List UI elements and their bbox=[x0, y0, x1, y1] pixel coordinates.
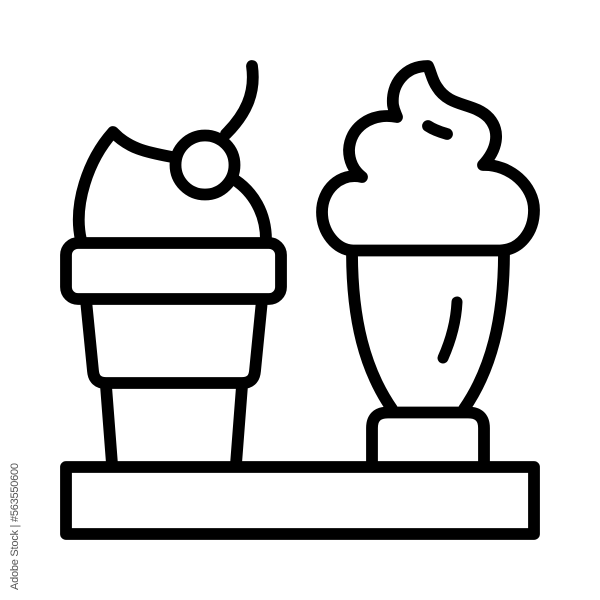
lower cup body bbox=[106, 386, 242, 464]
left cream scoop bbox=[79, 132, 266, 240]
cherry stem bbox=[226, 66, 253, 134]
tray bbox=[66, 467, 534, 534]
upper cup body bbox=[86, 300, 262, 383]
stock image credit: Adobe Stock | #563550600 bbox=[9, 463, 21, 590]
glass bowl bbox=[352, 252, 504, 409]
cup rim bbox=[66, 243, 281, 299]
cherry bbox=[176, 136, 234, 194]
glass highlight bbox=[443, 302, 457, 358]
swirl highlight bbox=[428, 126, 447, 134]
soft serve swirl bbox=[322, 66, 534, 250]
glass foot bbox=[372, 412, 484, 464]
icon: left ice cream cup with cherry bbox=[66, 66, 281, 464]
icon: right soft serve in glass bbox=[322, 66, 534, 464]
